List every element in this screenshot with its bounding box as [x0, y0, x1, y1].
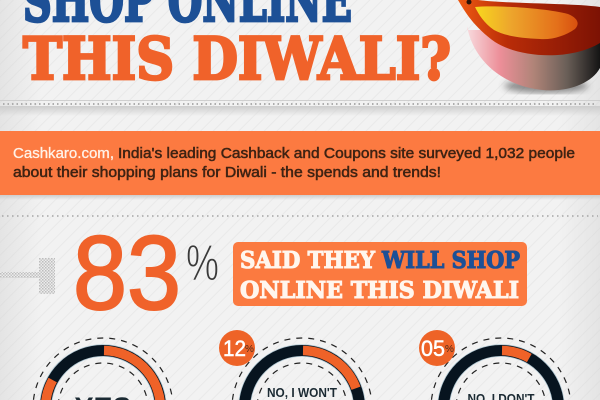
intro text: [13, 146, 575, 181]
arrow: hatched connector: [0, 258, 55, 294]
panel: intro banner: [0, 131, 600, 200]
badge: 05 percent: [419, 330, 455, 366]
chart: yes ring 83 percent: [33, 338, 173, 400]
callout: said they will shop online: WILL SHOP: [381, 246, 520, 274]
intro text: India's leading Cashback and Coupons site surveyed 1,032 people: [118, 146, 575, 162]
callout: said they will shop online: SAID THEY: [240, 246, 375, 274]
intro text: Cashkaro.com,: [13, 146, 114, 162]
badge: 05 percent: 05: [421, 336, 445, 361]
badge: 12 percent: [219, 330, 255, 366]
icon: diya lamp: [458, 0, 600, 93]
divider: dotted line under banner: [2, 215, 598, 217]
callout: said they will shop online: [233, 242, 527, 306]
badge: 12 percent: 12: [223, 336, 246, 361]
chart: no I won't ring 12 percent: [232, 338, 372, 400]
stat: 83 percent: %: [186, 234, 219, 291]
divider: top dotted band: [0, 100, 600, 116]
intro text: about their shopping plans for Diwali - the spends and trends!: [13, 165, 441, 181]
title: THIS DIWALI?: [23, 25, 451, 93]
chart: no I won't ring 12 percent: NO, I WON'T: [267, 386, 337, 400]
title: [23, 0, 451, 93]
badge: 12 percent: %: [245, 344, 254, 355]
chart: no I don't ring 5 percent: [431, 338, 571, 400]
stat: 83 percent: 83: [73, 215, 181, 332]
badge: 05 percent: %: [445, 344, 454, 355]
callout: said they will shop online: ONLINE THIS DIWALI: [240, 276, 519, 304]
